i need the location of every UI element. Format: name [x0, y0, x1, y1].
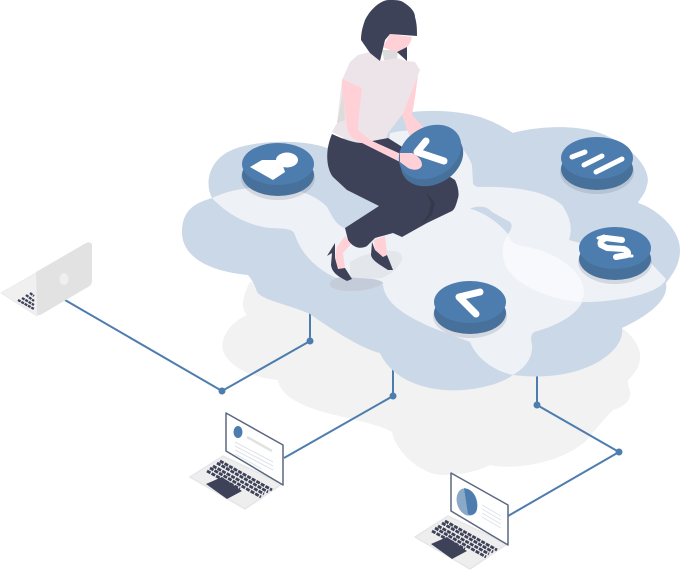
woman: [327, 0, 473, 281]
held coin: [389, 114, 473, 197]
coin: chevron: [433, 281, 507, 338]
coin: person: [241, 143, 315, 200]
legs: [335, 236, 351, 269]
floor shadow under feet: [330, 251, 402, 291]
left shoe: [327, 243, 352, 281]
neck: [382, 50, 398, 60]
coin: dollar: [578, 227, 652, 284]
back hair lock: [397, 47, 407, 61]
laptop: pie chart screen: [415, 473, 508, 569]
hair: [361, 0, 417, 61]
network connector lines: [65, 300, 622, 516]
gray background cloud: [222, 282, 640, 475]
coin: lines: [560, 137, 634, 194]
shirt: [332, 52, 420, 143]
pants fold: [422, 192, 435, 224]
blue cloud: [182, 111, 680, 390]
right shoe: [371, 242, 393, 270]
pants: [327, 134, 459, 248]
face: [383, 34, 412, 52]
near arm: [342, 79, 422, 170]
far arm: [402, 75, 426, 137]
shirt shadow: [337, 93, 345, 123]
laptop: document screen: [190, 413, 283, 509]
laptop: back view: [1, 242, 92, 316]
